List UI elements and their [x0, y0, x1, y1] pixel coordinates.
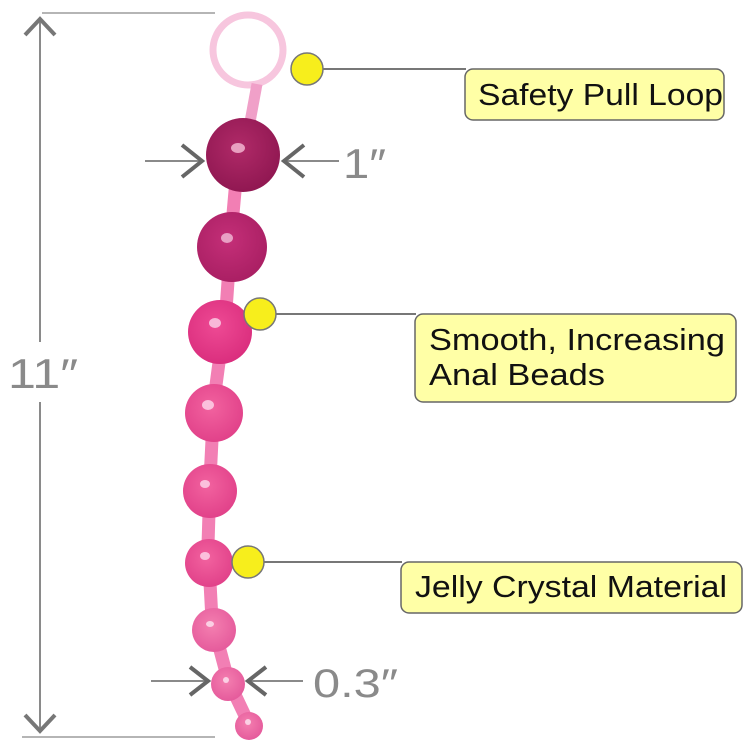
- callout: Jelly Crystal Material: Jelly Crystal Material: [415, 569, 727, 604]
- callout: Smooth, Increasing Anal Beads: [244, 298, 736, 402]
- connecting cord: [208, 180, 248, 722]
- dimension: 0.3 inch bead width: 0.3″: [313, 662, 398, 706]
- callout: Smooth, Increasing Anal Beads: Smooth, Increasing: [429, 322, 725, 357]
- dimension: overall length 11 inches: [8, 13, 215, 737]
- product: bead string: [183, 15, 283, 740]
- callout: Safety Pull Loop: Safety Pull Loop: [478, 77, 723, 112]
- pull loop: [213, 15, 283, 122]
- callout: Smooth, Increasing Anal Beads: Anal Beads: [429, 357, 605, 392]
- callout: Safety Pull Loop: [291, 53, 724, 120]
- dimension: 0.3 inch bead width: [151, 662, 398, 706]
- callout: Jelly Crystal Material: [232, 546, 742, 613]
- dimension: 1 inch bead width: [145, 140, 386, 187]
- beads: [183, 118, 280, 740]
- dimension: overall length 11 inches: 11″: [8, 350, 78, 397]
- dimension: 1 inch bead width: 1″: [343, 140, 386, 187]
